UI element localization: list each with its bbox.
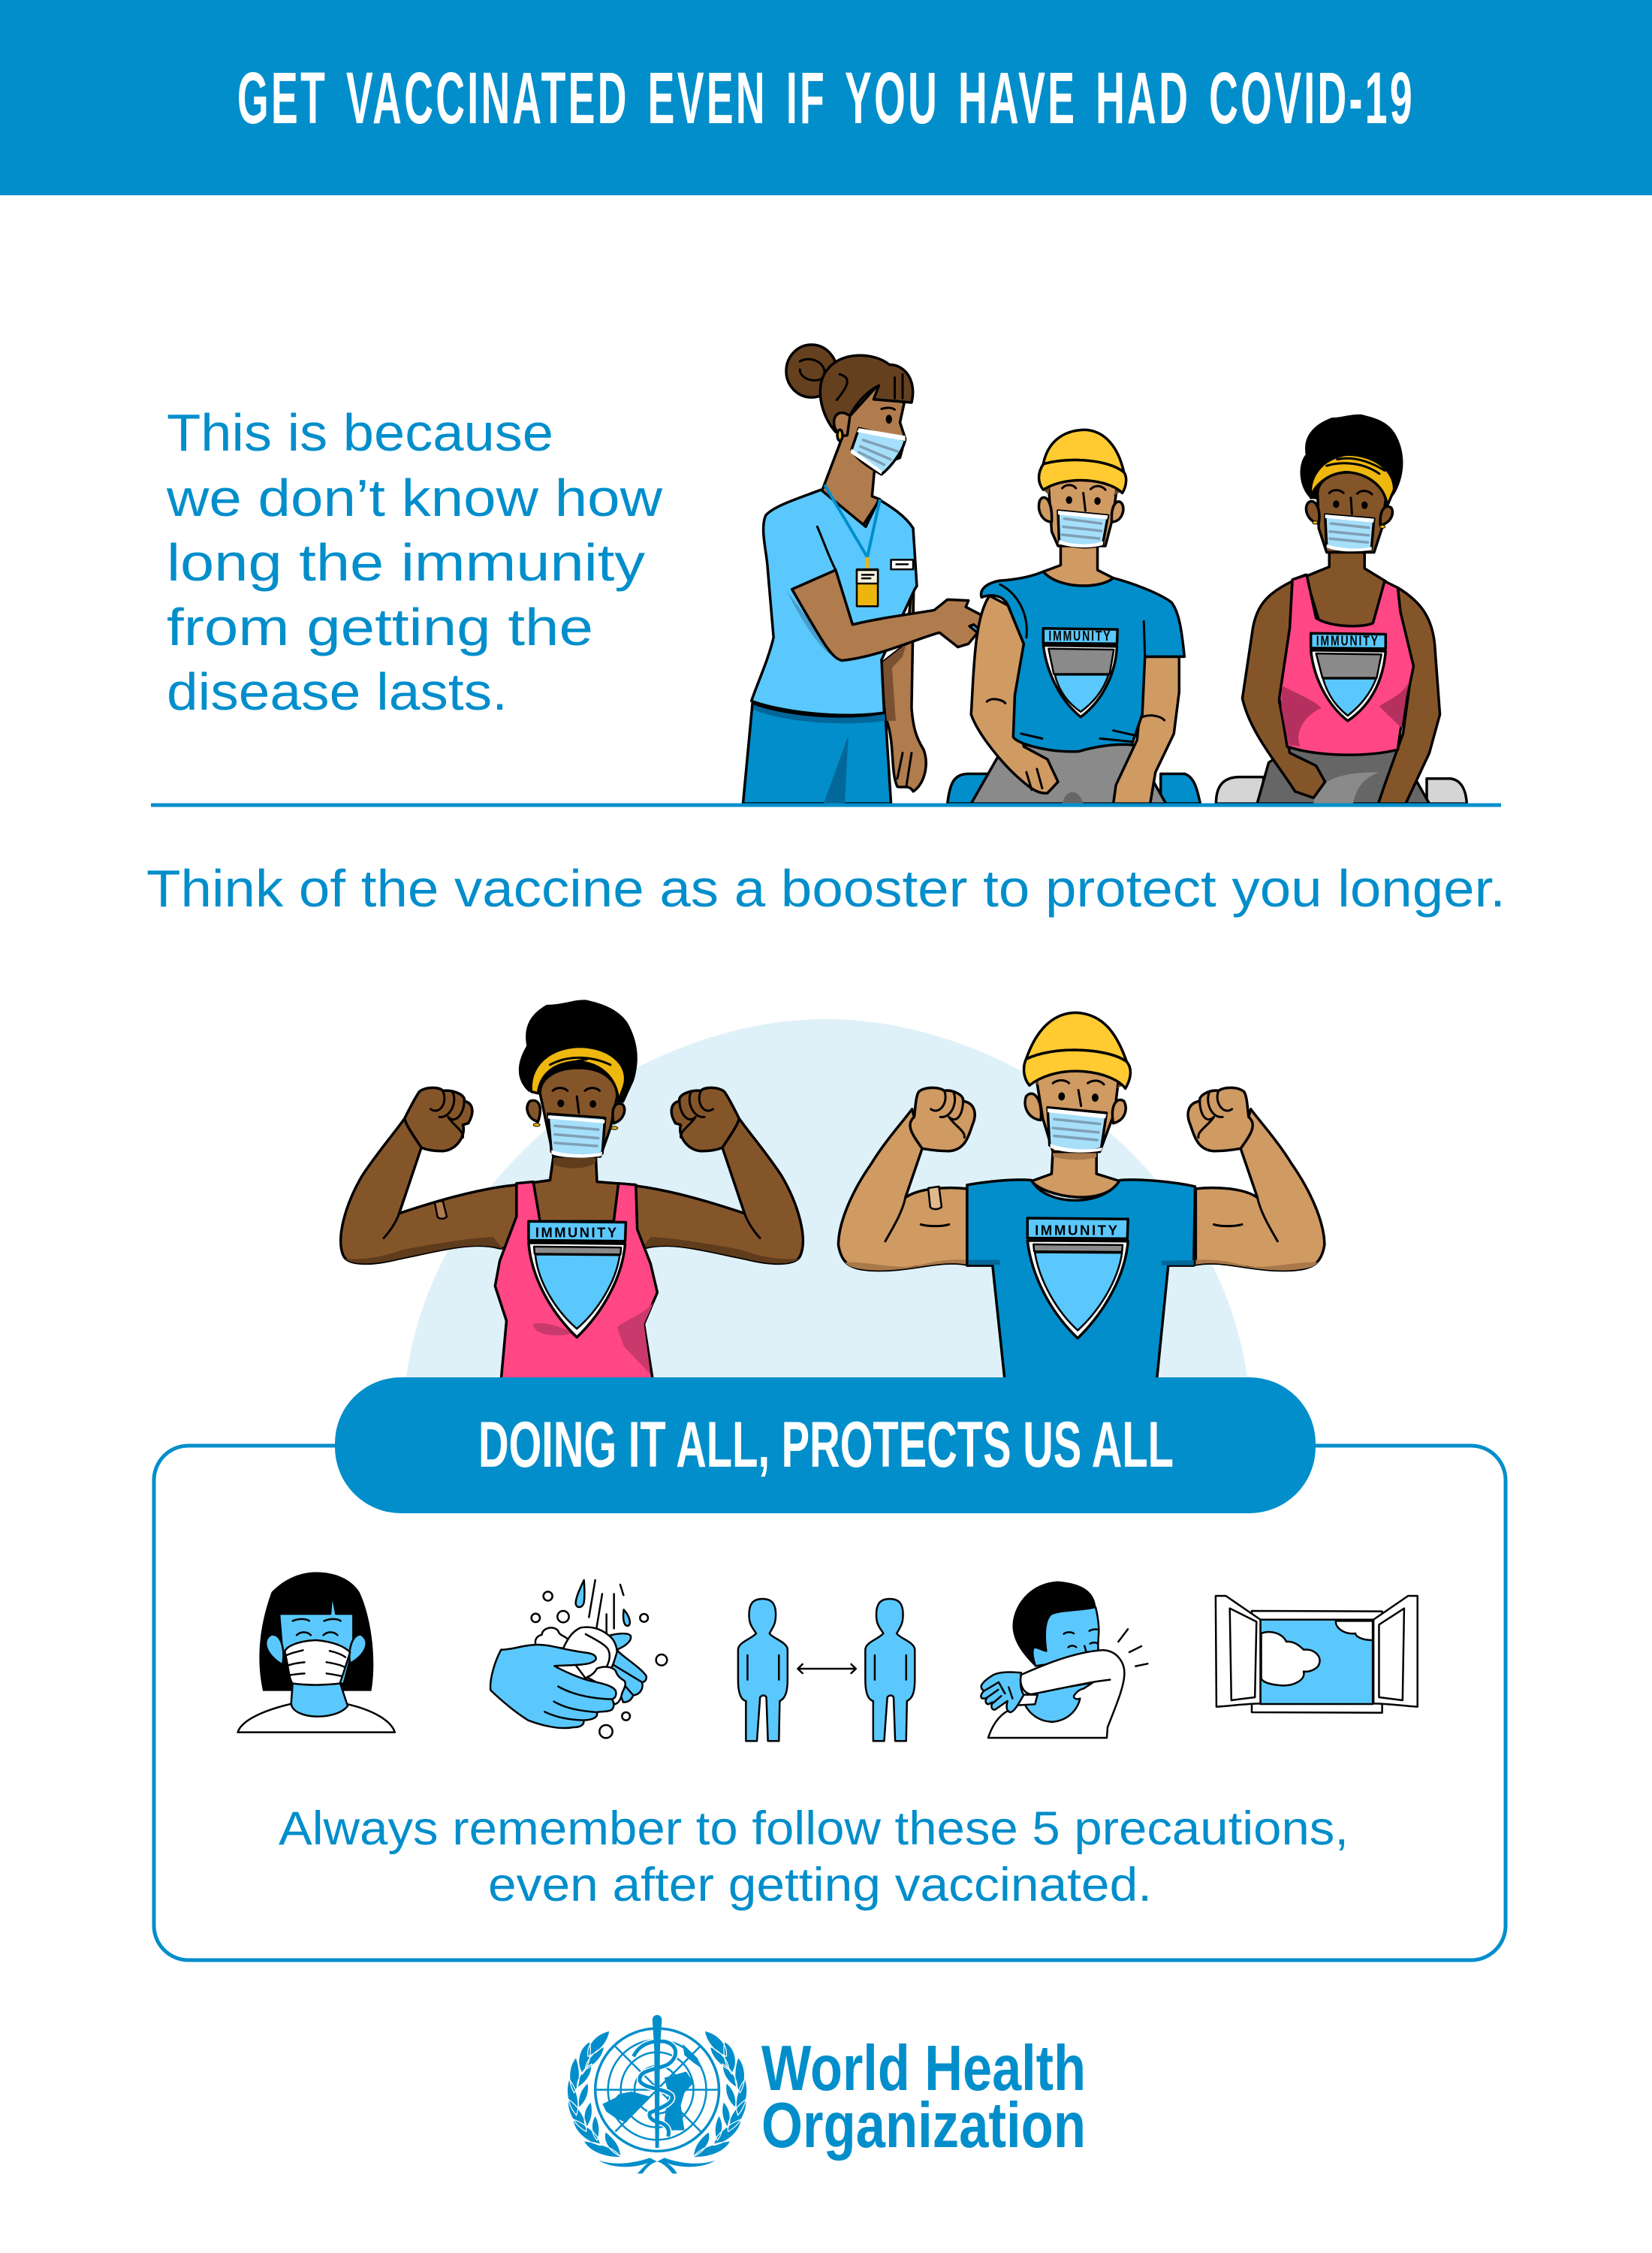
text block: because xyxy=(166,403,662,721)
text block: because: disease lasts. xyxy=(167,662,508,721)
text block: precautions: Always remember to follow these 5 precautions, xyxy=(279,1802,1349,1855)
icon: keep distance xyxy=(738,1599,915,1741)
woman shield xyxy=(529,1221,626,1338)
text block: because: from getting the xyxy=(167,598,593,656)
text block: because: This is because xyxy=(167,403,553,462)
illustration: vaccination scene xyxy=(743,345,1467,804)
icon: cough into elbow xyxy=(981,1582,1147,1738)
background dome xyxy=(405,1019,1248,1382)
organization name: Organization xyxy=(761,2090,1086,2161)
seated man xyxy=(948,430,1200,804)
precautions box xyxy=(154,1446,1506,1960)
text block: because: long the immunity xyxy=(167,533,645,592)
flexing woman xyxy=(341,1000,803,1380)
seated woman: IMMUNITY xyxy=(1316,633,1379,649)
nurse xyxy=(743,345,993,804)
icon: open window xyxy=(1216,1596,1418,1713)
woman shield: IMMUNITY xyxy=(535,1225,619,1241)
statement: booster: Think of the vaccine as a booster to protect you longer. xyxy=(146,859,1506,918)
icon: wash hands xyxy=(490,1580,667,1738)
ground line xyxy=(151,804,1501,807)
illustration: flexing figures xyxy=(341,1000,1325,1380)
flexing man xyxy=(838,1012,1325,1380)
tank shield xyxy=(1311,633,1385,721)
man shield: IMMUNITY xyxy=(1035,1222,1120,1238)
heading pill xyxy=(335,1377,1316,1513)
organization name xyxy=(761,2033,1086,2161)
woman arms xyxy=(341,1087,803,1263)
organization name: World Health xyxy=(761,2033,1086,2104)
seated woman xyxy=(1216,415,1467,804)
man arms xyxy=(838,1087,1325,1271)
WHO emblem xyxy=(567,2015,747,2173)
logo: World Health Organization xyxy=(567,2015,1086,2173)
seated man: IMMUNITY xyxy=(1048,629,1112,644)
icon: wear a mask xyxy=(238,1572,395,1733)
text block: precautions xyxy=(279,1802,1349,1911)
man shield xyxy=(1027,1218,1128,1338)
arrow: distance xyxy=(797,1664,856,1673)
precaution icons xyxy=(238,1572,1418,1741)
heading pill: DOING IT ALL, PROTECTS US ALL xyxy=(478,1409,1174,1481)
header banner xyxy=(0,0,1652,195)
text block: precautions: even after getting vaccinated. xyxy=(488,1859,1152,1911)
text block: because: we don’t know how xyxy=(166,469,662,527)
shirt shield xyxy=(1043,629,1117,717)
